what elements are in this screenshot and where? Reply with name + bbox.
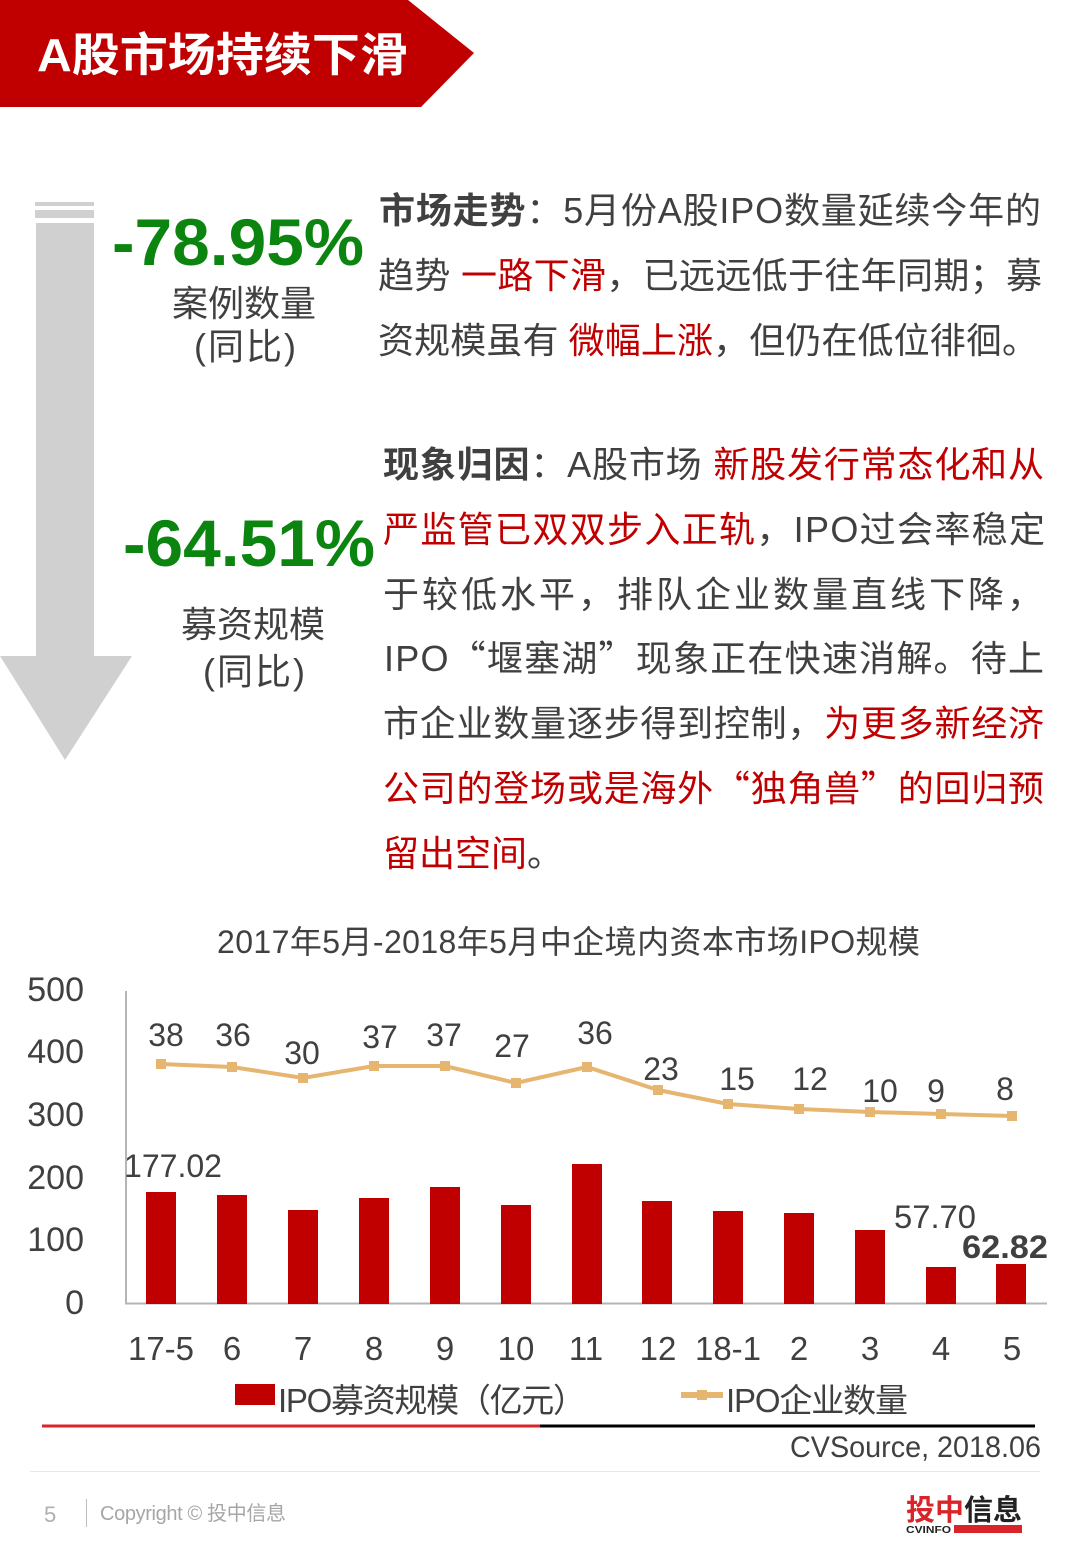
footer: page number and copyright: Copyright © 投中信息 bbox=[100, 1502, 286, 1525]
data labels: count: 37 bbox=[362, 1019, 398, 1055]
footer: page number and copyright bbox=[44, 1499, 286, 1527]
data labels: count: 30 bbox=[284, 1035, 320, 1071]
line: IPO count bbox=[156, 1059, 1017, 1121]
data labels: fundraising bbox=[124, 1148, 1048, 1265]
chart title: 2017年5月-2018年5月中企境内资本市场IPO规模 bbox=[217, 924, 920, 960]
data labels: count: 27 bbox=[494, 1028, 530, 1064]
stat: case count change: -78.95% bbox=[112, 205, 364, 279]
data labels: count: 10 bbox=[862, 1073, 898, 1109]
text block: causes: IPO“堰塞湖”现象正在快速消解。待上 bbox=[384, 630, 1044, 682]
combo chart: IPO fundraising and count bbox=[27, 971, 1048, 1367]
title banner bbox=[0, 0, 474, 107]
data labels: count: 37 bbox=[426, 1017, 462, 1053]
stat: case count change: 案例数量 bbox=[172, 283, 316, 324]
logo: CVINFO: 信息 bbox=[964, 1494, 1022, 1527]
y axis labels: 0 bbox=[65, 1284, 84, 1322]
title banner: A股市场持续下滑 bbox=[37, 29, 408, 81]
stat: fundraising change: (同比) bbox=[203, 651, 305, 692]
x axis labels bbox=[128, 1330, 1021, 1367]
icon: grey down arrow bbox=[0, 202, 132, 760]
data labels: count: 12 bbox=[792, 1061, 828, 1097]
bars: fundraising bbox=[146, 1164, 1026, 1304]
y axis labels bbox=[27, 971, 84, 1322]
data labels: fundraising: 62.82 bbox=[962, 1229, 1048, 1265]
data labels: count: 36 bbox=[215, 1017, 251, 1053]
text block: market trend: 市场走势：5月份A股IPO数量延续今年的 bbox=[379, 190, 1041, 231]
stat: case count change: (同比) bbox=[194, 326, 296, 367]
stat: fundraising change: 募资规模 bbox=[181, 604, 325, 645]
y axis labels: 500 bbox=[27, 971, 84, 1009]
data labels: count: 23 bbox=[643, 1051, 679, 1087]
data labels: fundraising: 57.70 bbox=[894, 1199, 976, 1235]
x axis labels: 17-5 bbox=[128, 1330, 194, 1367]
legend: count: IPO企业数量 bbox=[726, 1382, 908, 1419]
text block: market trend: 资规模虽有 微幅上涨，但仍在低位徘徊。 bbox=[378, 320, 1038, 361]
x axis labels: 2 bbox=[790, 1330, 808, 1367]
text block: causes: 严监管已双双步入正轨，IPO过会率稳定 bbox=[383, 509, 1045, 550]
logo: CVINFO: 投中 bbox=[906, 1494, 964, 1527]
divider: source rule bbox=[42, 1424, 1035, 1428]
data labels: count: 38 bbox=[148, 1017, 184, 1053]
y axis labels: 300 bbox=[27, 1096, 84, 1134]
text block: causes: 留出空间。 bbox=[383, 833, 563, 874]
x axis labels: 11 bbox=[569, 1330, 603, 1367]
data labels: fundraising: 177.02 bbox=[124, 1148, 222, 1184]
text block: market trend bbox=[378, 190, 1042, 361]
stat: fundraising change bbox=[123, 506, 375, 692]
x axis labels: 18-1 bbox=[695, 1330, 761, 1367]
x axis labels: 5 bbox=[1003, 1330, 1021, 1367]
text block: causes: 于较低水平，排队企业数量直线下降， bbox=[383, 574, 1043, 615]
x axis labels: 6 bbox=[223, 1330, 241, 1367]
legend: fundraising: IPO募资规模（亿元） bbox=[278, 1382, 586, 1419]
x axis labels: 8 bbox=[365, 1330, 383, 1367]
x axis labels: 9 bbox=[436, 1330, 454, 1367]
stat: fundraising change: -64.51% bbox=[123, 506, 375, 580]
x axis labels: 10 bbox=[498, 1330, 534, 1367]
axes bbox=[126, 991, 1047, 1304]
text block: market trend: 趋势 一路下滑，已远远低于往年同期；募 bbox=[378, 255, 1042, 296]
text block: causes bbox=[383, 444, 1045, 874]
data labels: count: 36 bbox=[577, 1015, 613, 1051]
text block: causes: 公司的登场或是海外“独角兽”的回归预 bbox=[383, 760, 1044, 812]
y axis labels: 400 bbox=[27, 1033, 84, 1071]
data labels: count: 8 bbox=[996, 1071, 1014, 1107]
data labels: count bbox=[148, 1015, 1014, 1109]
data labels: count: 15 bbox=[719, 1061, 755, 1097]
logo: CVINFO bbox=[906, 1494, 1022, 1536]
text block: causes: 现象归因：A股市场 新股发行常态化和从 bbox=[383, 444, 1044, 485]
x axis labels: 4 bbox=[932, 1330, 950, 1367]
text block: causes: 市企业数量逐步得到控制，为更多新经济 bbox=[383, 703, 1044, 744]
stat: case count change bbox=[112, 205, 364, 367]
x axis labels: 12 bbox=[640, 1330, 676, 1367]
source note: CVSource, 2018.06 bbox=[790, 1431, 1041, 1464]
data labels: count: 9 bbox=[927, 1073, 945, 1109]
logo: CVINFO: CVINFO bbox=[906, 1525, 951, 1536]
x axis labels: 7 bbox=[294, 1330, 312, 1367]
x axis labels: 3 bbox=[861, 1330, 879, 1367]
footer: page number and copyright: 5 bbox=[44, 1502, 56, 1527]
y axis labels: 200 bbox=[27, 1159, 84, 1197]
y axis labels: 100 bbox=[27, 1221, 84, 1259]
